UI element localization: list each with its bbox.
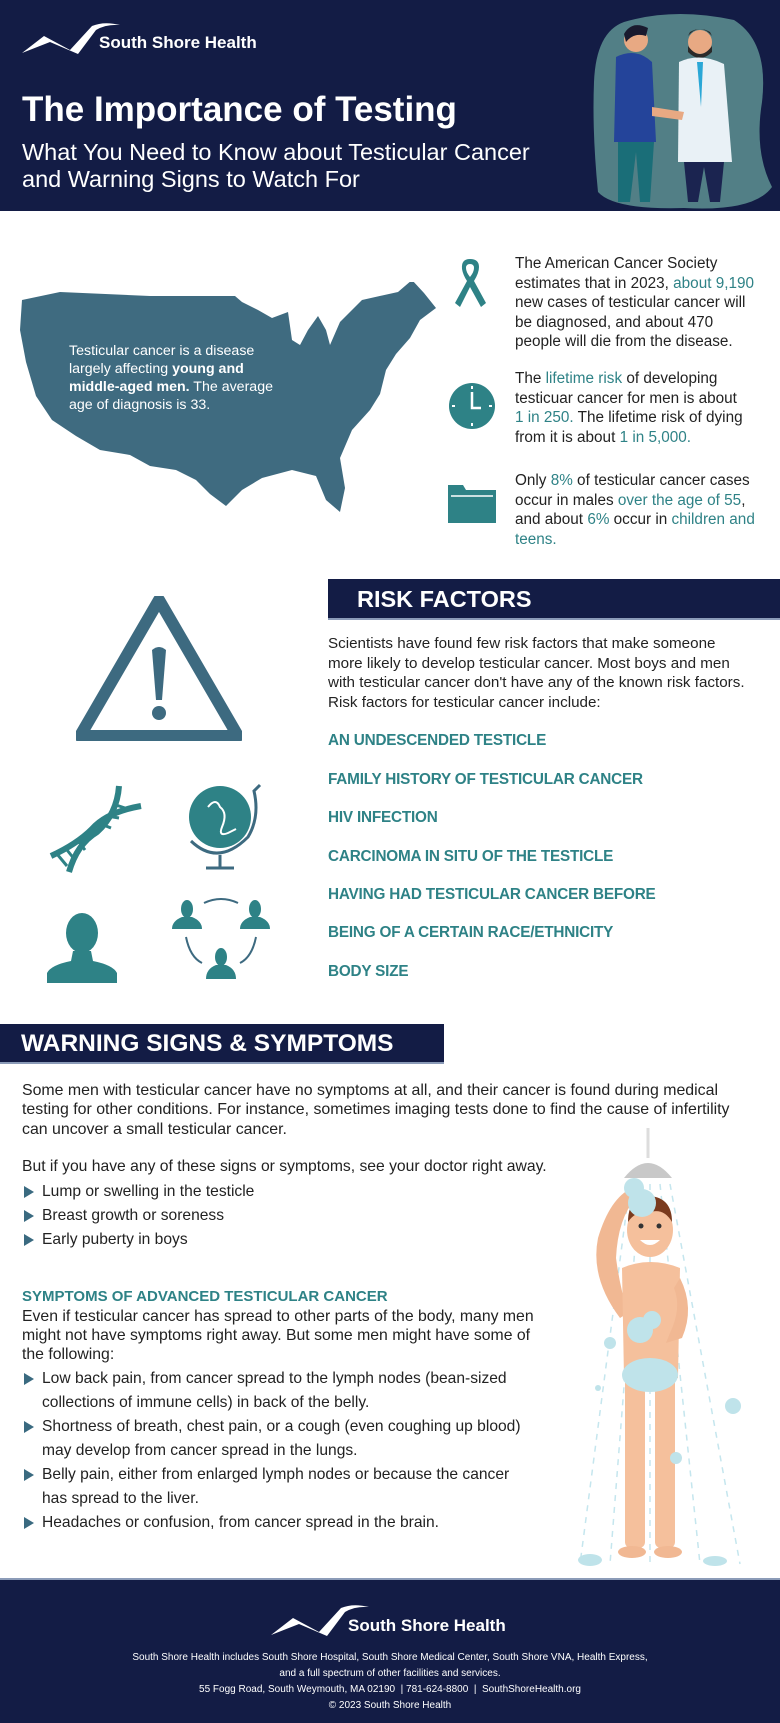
risk factors heading bar: RISK FACTORS (357, 586, 532, 612)
advanced symptoms heading: SYMPTOMS OF ADVANCED TESTICULAR CANCER (22, 1288, 388, 1305)
header banner (0, 0, 780, 211)
risk factors intro: with testicular cancer don't have any of the known risk factors. (328, 674, 745, 691)
icon: ribbon (455, 259, 486, 307)
see doctor line: But if you have any of these signs or symptoms, see your doctor right away. (22, 1158, 547, 1175)
stat 1 text: be diagnosed, and about 470 (515, 314, 713, 330)
subtitle: What You Need to Know about Testicular Cancer (22, 139, 530, 165)
icon: clock (449, 383, 495, 429)
map of the United States with text: Testicular cancer is a disease (69, 343, 254, 359)
advanced intro: might not have symptoms right away. But some men might have some of (22, 1327, 530, 1344)
advanced bullets: Headaches or confusion, from cancer spread in the brain. (42, 1514, 439, 1531)
stat 2 text: testicuar cancer for men is about (515, 390, 737, 406)
map of the United States with text: largely affecting young and (69, 361, 244, 377)
illustration: man in shower (578, 1128, 741, 1566)
footer logo (271, 1605, 506, 1636)
advanced intro (22, 1308, 534, 1363)
stat 3 text: teens. (515, 530, 557, 548)
warning signs heading bar: WARNING SIGNS & SYMPTOMS (21, 1030, 394, 1057)
warning signs heading bar (0, 1024, 444, 1064)
risk factors heading bar (328, 579, 780, 620)
logo: South Shore Health (99, 33, 257, 52)
warning intro text: can uncover a small testicular cancer. (22, 1121, 287, 1138)
stat 1 text: The American Cancer Society (515, 255, 717, 272)
stat 2 text: 1 in 250. The lifetime risk of dying (515, 409, 743, 426)
risk factor list: AN UNDESCENDED TESTICLE (328, 732, 546, 749)
stat 2 text: The lifetime risk of developing (515, 370, 717, 387)
symptom bullets (24, 1183, 254, 1248)
icon: DNA (50, 786, 142, 873)
symptom bullets: Early puberty in boys (42, 1231, 188, 1248)
warning intro text: Some men with testicular cancer have no symptoms at all, and their cancer is found during medical (22, 1082, 718, 1099)
stat 1 text: people will die from the disease. (515, 333, 733, 350)
advanced bullets (24, 1370, 521, 1531)
subtitle: and Warning Signs to Watch For (22, 166, 360, 192)
footer text: and a full spectrum of other facilities and services. (279, 1668, 501, 1679)
risk factor list: HIV INFECTION (328, 809, 438, 826)
advanced bullets: Shortness of breath, chest pain, or a cough (even coughing up blood) (42, 1418, 521, 1435)
symptom bullets: Breast growth or soreness (42, 1207, 224, 1224)
warning intro text: testing for other conditions. For instance, sometimes imaging tests done to find the cause of infertility (22, 1101, 730, 1118)
advanced bullets: collections of immune cells) in back of the belly. (42, 1394, 369, 1411)
risk factor list: HAVING HAD TESTICULAR CANCER BEFORE (328, 886, 656, 903)
icon: group of people (172, 898, 270, 979)
title: The Importance of Testing (22, 90, 457, 129)
advanced bullets: Belly pain, either from enlarged lymph nodes or because the cancer (42, 1466, 509, 1483)
map of the United States with text: age of diagnosis is 33. (69, 397, 210, 413)
footer text: 55 Fogg Road, South Weymouth, MA 02190 | 781-624-8800 | SouthShoreHealth.org (199, 1684, 581, 1695)
risk factors intro (328, 635, 745, 711)
stat 2 text: from it is about 1 in 5,000. (515, 428, 691, 446)
risk factors intro: more likely to develop testicular cancer. Most boys and men (328, 655, 730, 672)
stat 3 text (515, 472, 755, 548)
advanced bullets: Low back pain, from cancer spread to the lymph nodes (bean-sized (42, 1370, 507, 1387)
map of the United States with text (20, 282, 436, 512)
risk factor list (328, 732, 656, 980)
footer text: South Shore Health includes South Shore Hospital, South Shore Medical Center, South Shore VNA, Health Express, (132, 1652, 648, 1663)
stat 2 text (515, 370, 743, 446)
risk factor list: CARCINOMA IN SITU OF THE TESTICLE (328, 848, 613, 865)
footer text: © 2023 South Shore Health (329, 1700, 451, 1711)
stat 3 text: Only 8% of testicular cancer cases (515, 472, 750, 489)
footer logo: South Shore Health (348, 1616, 506, 1635)
advanced bullets: may develop from cancer spread in the lungs. (42, 1442, 358, 1459)
footer (0, 1578, 780, 1723)
stat 3 text: and about 6% occur in children and (515, 511, 755, 528)
stat 3 text: occur in males over the age of 55, (515, 492, 745, 508)
icon: person (47, 913, 117, 983)
icon: warning triangle (76, 596, 242, 741)
icon: globe (189, 784, 261, 870)
map of the United States with text: middle-aged men. The average (69, 379, 273, 395)
advanced intro: Even if testicular cancer has spread to other parts of the body, many men (22, 1308, 534, 1325)
icon: folder (448, 485, 496, 523)
advanced intro: the following: (22, 1346, 114, 1363)
risk factor list: FAMILY HISTORY OF TESTICULAR CANCER (328, 771, 643, 788)
stat 1 text: new cases of testicular cancer will (515, 294, 745, 311)
symptom bullets: Lump or swelling in the testicle (42, 1183, 254, 1200)
risk factor list: BEING OF A CERTAIN RACE/ETHNICITY (328, 924, 613, 941)
risk factor list: BODY SIZE (328, 963, 408, 980)
risk factors intro: Risk factors for testicular cancer include: (328, 694, 601, 711)
footer text (132, 1652, 648, 1711)
risk factors intro: Scientists have found few risk factors that make someone (328, 635, 715, 652)
advanced bullets: has spread to the liver. (42, 1490, 199, 1507)
subtitle (22, 139, 530, 192)
warning intro text (22, 1082, 730, 1138)
illustration: patient and doctor (594, 14, 772, 208)
stat 1 text (515, 255, 754, 350)
logo (22, 23, 257, 54)
stat 1 text: estimates that in 2023, about 9,190 (515, 274, 754, 292)
